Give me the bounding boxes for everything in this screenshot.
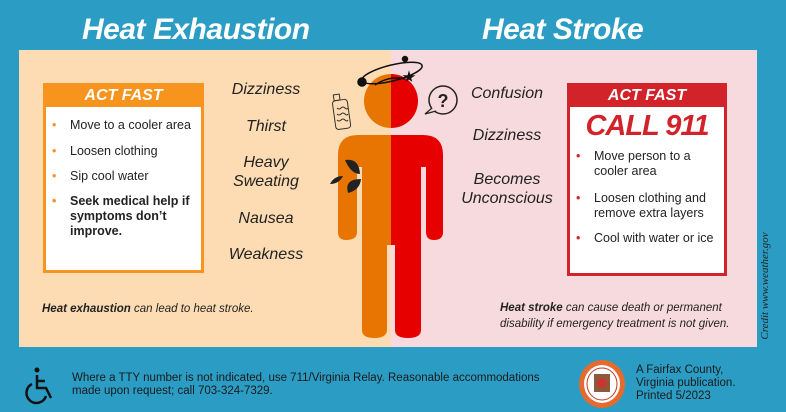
footer text: accessibility: Where a TTY number is not indicated, use 711/Virginia Relay. Reasonable accommodations xyxy=(72,372,540,384)
header: act fast xyxy=(45,85,202,107)
list: exhaustion steps: Move to a cooler area xyxy=(70,118,191,132)
symptom: Weakness xyxy=(229,246,303,263)
header: act fast: ACT FAST xyxy=(608,87,686,104)
title: heat exhaustion: Heat Exhaustion xyxy=(82,13,310,46)
list: stroke steps: Move person to a cooler area xyxy=(594,149,691,178)
footer text: publication: A Fairfax County, xyxy=(636,364,723,376)
credit: Credit www.weather.gov xyxy=(759,232,771,340)
footer text: publication: Virginia publication. xyxy=(636,377,736,389)
list: exhaustion steps xyxy=(52,118,191,238)
list: exhaustion steps: Seek medical help if symptoms don’t improve. xyxy=(70,194,190,238)
list: stroke steps: Cool with water or ice xyxy=(594,231,714,245)
symptom: Dizziness xyxy=(232,81,300,98)
figure: person half orange half red xyxy=(330,56,458,338)
symptom: Dizziness xyxy=(473,127,541,144)
icon: question bubble xyxy=(425,86,457,114)
symptoms: exhaustion xyxy=(229,81,303,263)
icon: water bottle xyxy=(332,94,351,130)
list: stroke steps xyxy=(576,149,714,245)
header: act fast: ACT FAST xyxy=(84,87,163,104)
footer text: publication: Printed 5/2023 xyxy=(636,390,711,402)
footer text: publication xyxy=(636,364,736,402)
symptom: Sweating xyxy=(233,173,299,190)
icon: county seal xyxy=(579,360,625,408)
list: exhaustion steps: Loosen clothing xyxy=(70,144,158,158)
panel: heat stroke background xyxy=(391,50,757,347)
symptom xyxy=(461,171,553,207)
title: heat stroke: Heat Stroke xyxy=(482,13,643,46)
icon: wheelchair xyxy=(25,368,52,404)
list: exhaustion steps: Sip cool water xyxy=(70,169,149,183)
symptom: Thirst xyxy=(246,118,286,135)
symptom: Becomes xyxy=(474,171,540,188)
symptom: Nausea xyxy=(238,210,294,227)
call 911: CALL 911 xyxy=(585,110,709,142)
symptom: Confusion xyxy=(471,85,543,102)
symptom: Heavy xyxy=(243,154,289,171)
note: stroke: Heat stroke can cause death or permanent disability if emergency treatment is not given. xyxy=(500,302,729,330)
panel: heat exhaustion background xyxy=(19,50,391,347)
list: stroke steps: Loosen clothing and remove extra layers xyxy=(594,191,706,220)
header: act fast xyxy=(569,85,725,107)
box: act fast exhaustion xyxy=(43,83,204,273)
icon: dizzy orbit xyxy=(358,56,424,88)
note: exhaustion: Heat exhaustion can lead to heat stroke. xyxy=(42,303,254,315)
symptom: Unconscious xyxy=(461,190,553,207)
box: act fast stroke xyxy=(567,83,727,276)
footer text: accessibility xyxy=(72,372,540,397)
icon: sweat drops xyxy=(330,160,361,193)
symptom xyxy=(233,154,299,190)
footer text: accessibility: made upon request; call 703-324-7329. xyxy=(72,385,273,397)
symptoms: stroke xyxy=(461,85,553,207)
icon: question bubble: ? xyxy=(438,91,448,111)
